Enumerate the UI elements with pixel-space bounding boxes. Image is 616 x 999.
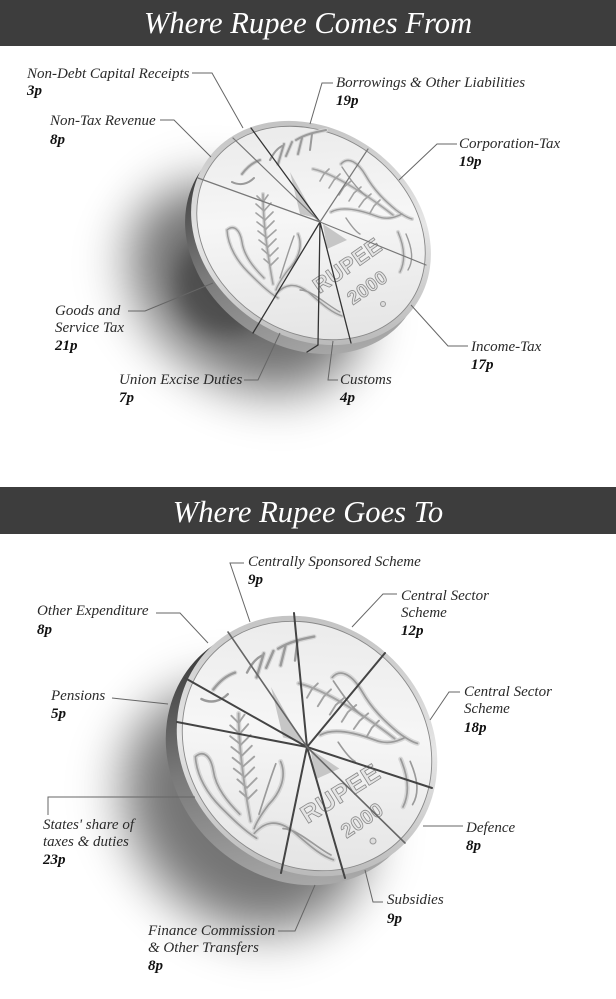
- label: finance commission: & Other Transfers: [148, 940, 259, 956]
- slice dividers: [198, 128, 426, 352]
- label: goods and service tax: [54, 283, 213, 354]
- slice dividers: [177, 613, 432, 878]
- coin shadow: [90, 141, 400, 435]
- label: subsidies: [365, 870, 444, 927]
- coin emblem: [195, 637, 417, 860]
- label: centrally sponsored scheme: [230, 554, 421, 622]
- label: states' share: 23p: [42, 852, 66, 868]
- label: subsidies: Subsidies: [387, 892, 444, 908]
- label: union excise duties: Union Excise Duties: [119, 372, 242, 388]
- label: pensions: Pensions: [50, 688, 105, 704]
- title: where rupee goes to: [0, 487, 616, 534]
- coin edge: [142, 86, 466, 400]
- label: centrally sponsored scheme: 9p: [248, 572, 264, 588]
- label: borrowings: [310, 75, 525, 124]
- label: goods and service tax: 21p: [54, 338, 78, 354]
- label: non-tax revenue: 8p: [50, 132, 66, 148]
- title: where rupee comes from: [0, 0, 616, 46]
- coin text: year: 2000: [344, 267, 392, 310]
- label: goods and service tax: Service Tax: [55, 320, 124, 336]
- coin chart: uses of the rupee: [74, 562, 491, 981]
- title: where rupee goes to: Where Rupee Goes To: [173, 495, 443, 529]
- coin chart: sources of the rupee: [90, 75, 475, 435]
- label: central sector scheme 12p: Scheme: [401, 605, 447, 621]
- label: non-debt capital receipts: 3p: [26, 83, 42, 99]
- label: income tax: [411, 305, 542, 373]
- label: defence: Defence: [465, 820, 515, 836]
- label: central sector scheme 18p: Scheme: [464, 701, 510, 717]
- label: pensions: [50, 688, 168, 722]
- label: finance commission: Finance Commission: [147, 923, 275, 939]
- label: finance commission: [147, 885, 315, 974]
- label: subsidies: 9p: [387, 911, 402, 927]
- label: union excise duties: 7p: [119, 390, 134, 406]
- label: other expenditure: Other Expenditure: [37, 603, 149, 619]
- label: goods and service tax: Goods and: [55, 303, 121, 319]
- label: customs: [328, 341, 392, 406]
- label: income tax: 17p: [471, 357, 494, 373]
- label: corporation tax: Corporation-Tax: [459, 136, 560, 152]
- label: states' share: States' share of: [43, 817, 136, 833]
- label: defence: [423, 820, 515, 854]
- label: corporation tax: [399, 136, 560, 180]
- label: non-debt capital receipts: Non-Debt Capital Receipts: [26, 66, 190, 82]
- label: central sector scheme 12p: 12p: [401, 623, 424, 639]
- label: income tax: Income-Tax: [470, 339, 542, 355]
- coin face: [131, 570, 483, 922]
- label: central sector scheme 18p: [430, 684, 552, 736]
- label: states' share: taxes & duties: [43, 834, 129, 850]
- label: pensions: 5p: [51, 706, 66, 722]
- label: non-debt capital receipts: [26, 66, 243, 128]
- label: defence: 8p: [466, 838, 482, 854]
- label: other expenditure: 8p: [37, 622, 52, 638]
- label: borrowings: 19p: [336, 93, 359, 109]
- coin text: rupee: RUPEE: [308, 233, 387, 298]
- label: corporation tax: 19p: [459, 154, 482, 170]
- label: states' share: [42, 797, 195, 868]
- label: central sector scheme 12p: [352, 588, 489, 639]
- label: union excise duties: [119, 333, 280, 406]
- label: customs: 4p: [339, 390, 356, 406]
- label: central sector scheme 18p: 18p: [464, 720, 487, 736]
- coin rim: [147, 75, 475, 391]
- coin emblem: [227, 130, 412, 316]
- coin face: [155, 83, 467, 383]
- label: non-tax revenue: [49, 113, 211, 157]
- coin shadow: [74, 639, 416, 981]
- coin dot: [380, 302, 386, 306]
- label: non-tax revenue: Non-Tax Revenue: [49, 113, 156, 129]
- coin text: year: 2000: [337, 799, 388, 843]
- label: other expenditure: [37, 603, 208, 643]
- label: central sector scheme 18p: Central Sector: [464, 684, 552, 700]
- coin dot: [370, 838, 376, 844]
- title: where rupee comes from: Where Rupee Comes From: [144, 6, 472, 40]
- label: central sector scheme 12p: Central Sector: [401, 588, 489, 604]
- label: finance commission: 8p: [148, 958, 164, 974]
- label: borrowings: Borrowings & Other Liabilities: [336, 75, 525, 91]
- coin text: rupee: RUPEE: [296, 758, 386, 829]
- label: customs: Customs: [340, 372, 392, 388]
- coin rim: [123, 562, 491, 930]
- label: centrally sponsored scheme: Centrally Sponsored Scheme: [248, 554, 421, 570]
- coin edge: [112, 571, 480, 939]
